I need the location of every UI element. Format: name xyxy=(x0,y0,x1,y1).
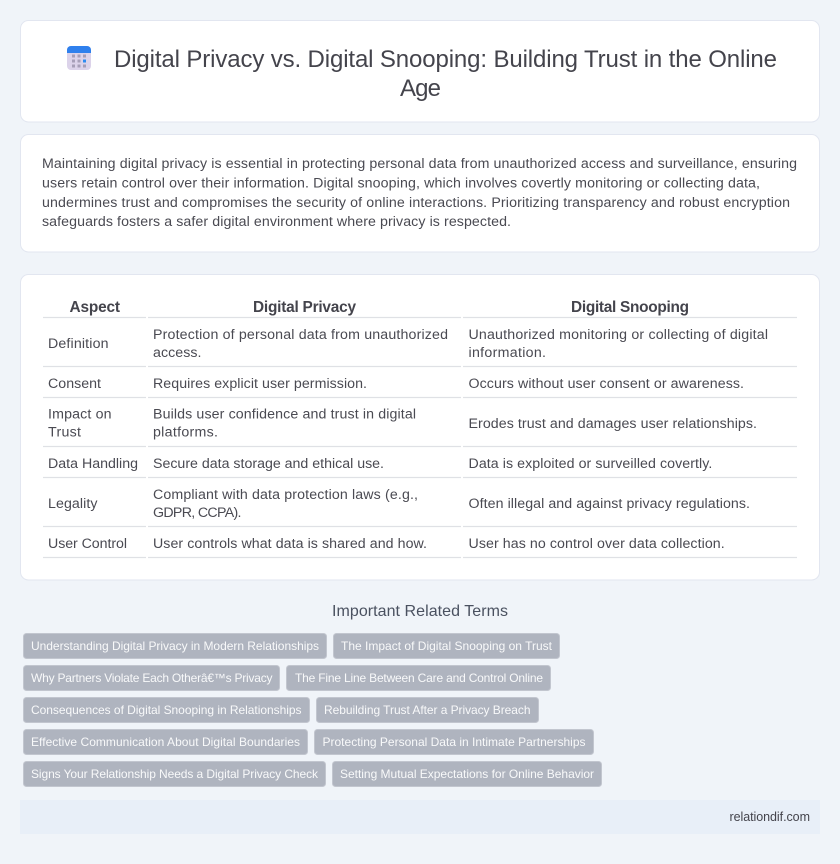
tag xyxy=(24,762,326,786)
row: impact on trust: Impact on xyxy=(48,406,112,422)
row: consent xyxy=(48,376,744,392)
row: definition: Protection of personal data from unauthorized xyxy=(153,327,448,343)
row: data handling: Data Handling xyxy=(48,456,138,472)
row: consent: Occurs without user consent or awareness. xyxy=(468,376,744,392)
tag xyxy=(316,698,538,722)
tag xyxy=(24,698,310,722)
panel: comparison table xyxy=(20,274,820,580)
row: legality: GDPR, CCPA). xyxy=(153,505,242,521)
tag: The Impact of Digital Snooping on Trust xyxy=(341,639,553,653)
row: user control: User controls what data is shared and how. xyxy=(153,536,427,552)
row: definition xyxy=(48,327,768,361)
row: data handling: Secure data storage and ethical use. xyxy=(153,456,384,472)
tag xyxy=(24,666,280,690)
row: legality: Compliant with data protection laws (e.g., xyxy=(153,487,418,503)
tag: Consequences of Digital Snooping in Relationships xyxy=(31,703,302,717)
row: impact on trust: Trust xyxy=(48,425,81,441)
tag: Signs Your Relationship Needs a Digital Privacy Check xyxy=(31,767,319,781)
table header: Digital Snooping xyxy=(571,299,689,316)
row: user control: User has no control over data collection. xyxy=(468,536,725,552)
row: definition: Unauthorized monitoring or collecting of digital xyxy=(468,327,768,343)
row: user control: User Control xyxy=(48,536,127,552)
tag: Protecting Personal Data in Intimate Partnerships xyxy=(322,735,586,749)
table header xyxy=(70,299,689,316)
table header: Digital Privacy xyxy=(253,299,356,316)
table header: Aspect xyxy=(70,299,120,316)
tag xyxy=(334,634,560,658)
row: impact on trust xyxy=(48,406,757,441)
panel: title header xyxy=(20,20,820,122)
tag xyxy=(332,762,602,786)
heading: related terms: Important Related Terms xyxy=(332,603,508,620)
row: impact on trust: Builds user confidence and trust in digital xyxy=(153,406,416,422)
tag xyxy=(24,634,326,658)
row: impact on trust: platforms. xyxy=(153,425,218,441)
row: legality xyxy=(48,487,750,521)
row: consent: Consent xyxy=(48,376,101,392)
tag: Understanding Digital Privacy in Modern Relationships xyxy=(31,639,319,653)
row: data handling: Data is exploited or surveilled covertly. xyxy=(468,456,712,472)
row: data handling xyxy=(48,456,712,472)
icon: calendar xyxy=(67,46,91,70)
row: definition: Definition xyxy=(48,336,108,352)
tag xyxy=(314,730,594,754)
related term tags xyxy=(24,634,602,786)
footer: relationdif.com xyxy=(730,810,810,824)
intro paragraph: safeguards fosters a safer digital environment where privacy is respected. xyxy=(42,214,511,230)
intro paragraph: users retain control over their information. Digital snooping, which involves covertly monitoring or collecting data, xyxy=(42,176,760,192)
intro paragraph: Maintaining digital privacy is essential in protecting personal data from unauthorized access and surveillance, ensuring xyxy=(42,156,797,172)
panel: introduction xyxy=(20,134,820,252)
tag xyxy=(286,666,550,690)
tag: Why Partners Violate Each Otherâ€™s Privacy xyxy=(31,671,272,685)
footer xyxy=(20,800,820,834)
row: definition: access. xyxy=(153,345,202,361)
row: legality: Legality xyxy=(48,496,98,512)
tag: Effective Communication About Digital Boundaries xyxy=(31,735,300,749)
row: user control xyxy=(48,536,725,552)
title: Age xyxy=(400,75,441,102)
row: impact on trust: Erodes trust and damages user relationships. xyxy=(468,416,757,432)
tag xyxy=(24,730,308,754)
intro paragraph: undermines trust and compromises the security of online interactions. Prioritizing transparency and robust encryption xyxy=(42,195,790,211)
tag: Setting Mutual Expectations for Online Behavior xyxy=(340,767,594,781)
row: legality: Often illegal and against privacy regulations. xyxy=(468,496,750,512)
title: Digital Privacy vs. Digital Snooping: Building Trust in the Online xyxy=(114,46,777,73)
tag: Rebuilding Trust After a Privacy Breach xyxy=(324,703,530,717)
row: definition: information. xyxy=(468,345,546,361)
tag: The Fine Line Between Care and Control Online xyxy=(295,671,543,685)
row: consent: Requires explicit user permission. xyxy=(153,376,367,392)
